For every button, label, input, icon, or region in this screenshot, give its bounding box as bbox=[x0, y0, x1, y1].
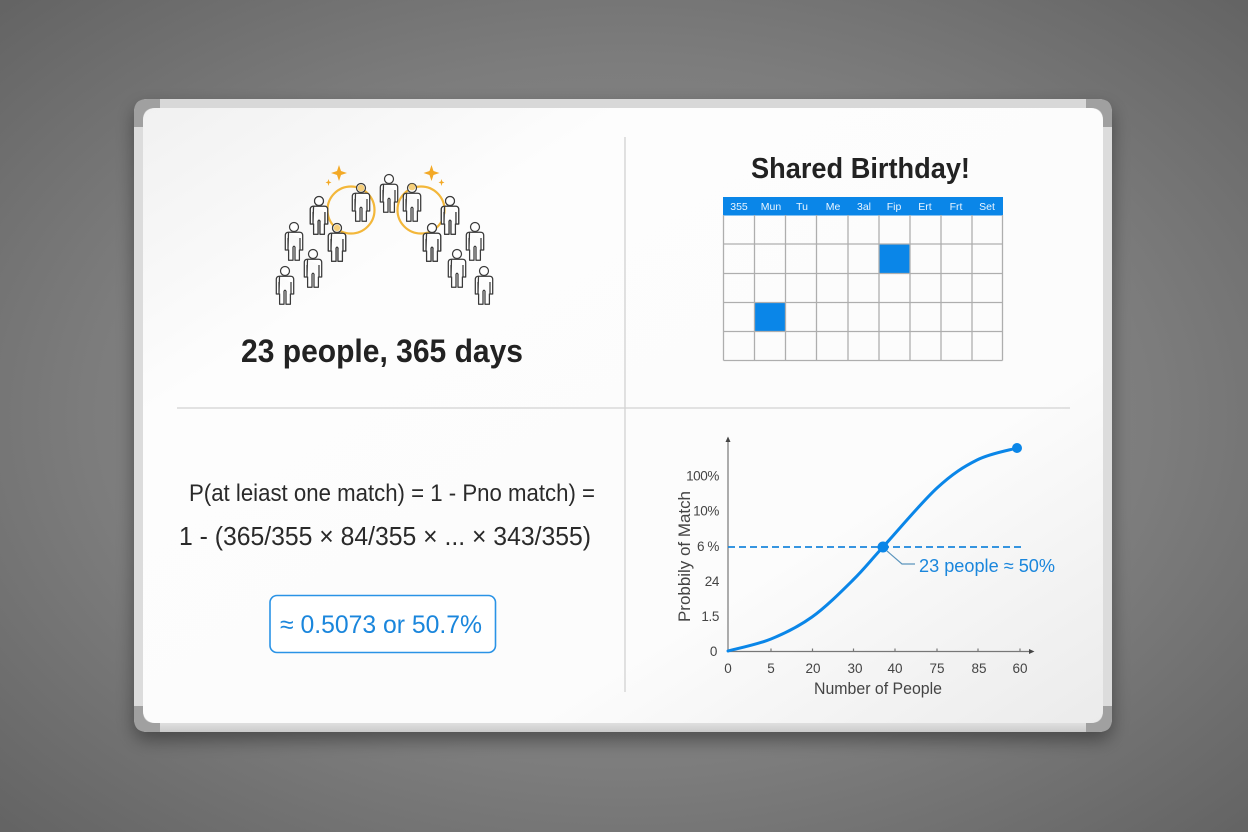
calendar header labels: Ert bbox=[918, 201, 932, 213]
panel: calendar bbox=[723, 197, 1003, 360]
y axis title: Probbily of Match bbox=[676, 491, 694, 622]
y tick labels: 10% bbox=[693, 504, 719, 518]
callout leader bbox=[887, 551, 915, 564]
x tick labels: 20 bbox=[805, 661, 821, 676]
heading: 23 people: 23 people, 365 days bbox=[241, 333, 523, 369]
calendar header labels: Set bbox=[979, 201, 995, 213]
x tick labels: 40 bbox=[887, 661, 903, 676]
x tick labels bbox=[724, 661, 1028, 676]
x tick labels: 75 bbox=[929, 661, 945, 676]
quadrant dividers bbox=[177, 137, 1070, 692]
y tick labels: 24 bbox=[705, 574, 720, 589]
calendar header labels: Me bbox=[826, 201, 840, 213]
highlighted day top bbox=[880, 244, 910, 273]
icon: gold head highlights bbox=[334, 184, 415, 231]
formula line 1: P(at leiast one match) = 1 - Pno match) = bbox=[189, 480, 595, 507]
y tick labels: 1.5 bbox=[701, 609, 719, 624]
calendar header labels: 355 bbox=[730, 201, 748, 213]
icon: sparkles bbox=[326, 165, 444, 186]
calendar header labels: Fip bbox=[887, 201, 901, 213]
icon: circled people bbox=[310, 184, 459, 261]
calendar header bbox=[723, 197, 1003, 216]
marker: end point bbox=[1012, 443, 1022, 453]
callout label: 23 people ≈ 50% bbox=[919, 555, 1055, 576]
whiteboard frame bbox=[134, 99, 1112, 732]
icon: people group bbox=[276, 174, 493, 304]
y tick labels: 0 bbox=[710, 644, 717, 659]
callout: result: ≈ 0.5073 or 50.7% bbox=[280, 611, 482, 639]
callout: result bbox=[270, 596, 496, 652]
dashed 50% line bbox=[728, 546, 1025, 548]
calendar header labels: 3al bbox=[857, 201, 871, 213]
formula line 2: 1 - (365/355 × 84/355 × ... × 343/355) bbox=[179, 523, 591, 551]
x tick labels: 85 bbox=[971, 661, 987, 676]
calendar header labels: Frt bbox=[950, 201, 962, 213]
probability curve bbox=[728, 448, 1017, 651]
axes bbox=[728, 441, 1030, 652]
calendar grid bbox=[724, 215, 1002, 360]
x axis title: Number of People bbox=[814, 680, 942, 698]
panel: crowd of people bbox=[276, 165, 493, 304]
y tick labels: 6 % bbox=[697, 539, 719, 554]
y tick labels: 100% bbox=[686, 468, 719, 484]
marker: crossover point bbox=[878, 542, 888, 552]
icon: right highlight circle bbox=[398, 186, 444, 234]
calendar header labels: Tu bbox=[796, 201, 808, 213]
y tick labels bbox=[686, 468, 720, 659]
calendar header labels: Mun bbox=[761, 201, 781, 213]
x tick labels: 0 bbox=[724, 661, 732, 676]
x tick labels: 30 bbox=[847, 661, 863, 676]
line chart bbox=[676, 436, 1055, 698]
highlighted day bottom bbox=[755, 303, 786, 332]
x tick labels: 60 bbox=[1012, 661, 1028, 676]
calendar header labels bbox=[730, 201, 995, 213]
heading: shared birthday: Shared Birthday! bbox=[751, 153, 970, 185]
icon: left highlight circle bbox=[328, 186, 374, 234]
x tick labels: 5 bbox=[767, 661, 775, 676]
